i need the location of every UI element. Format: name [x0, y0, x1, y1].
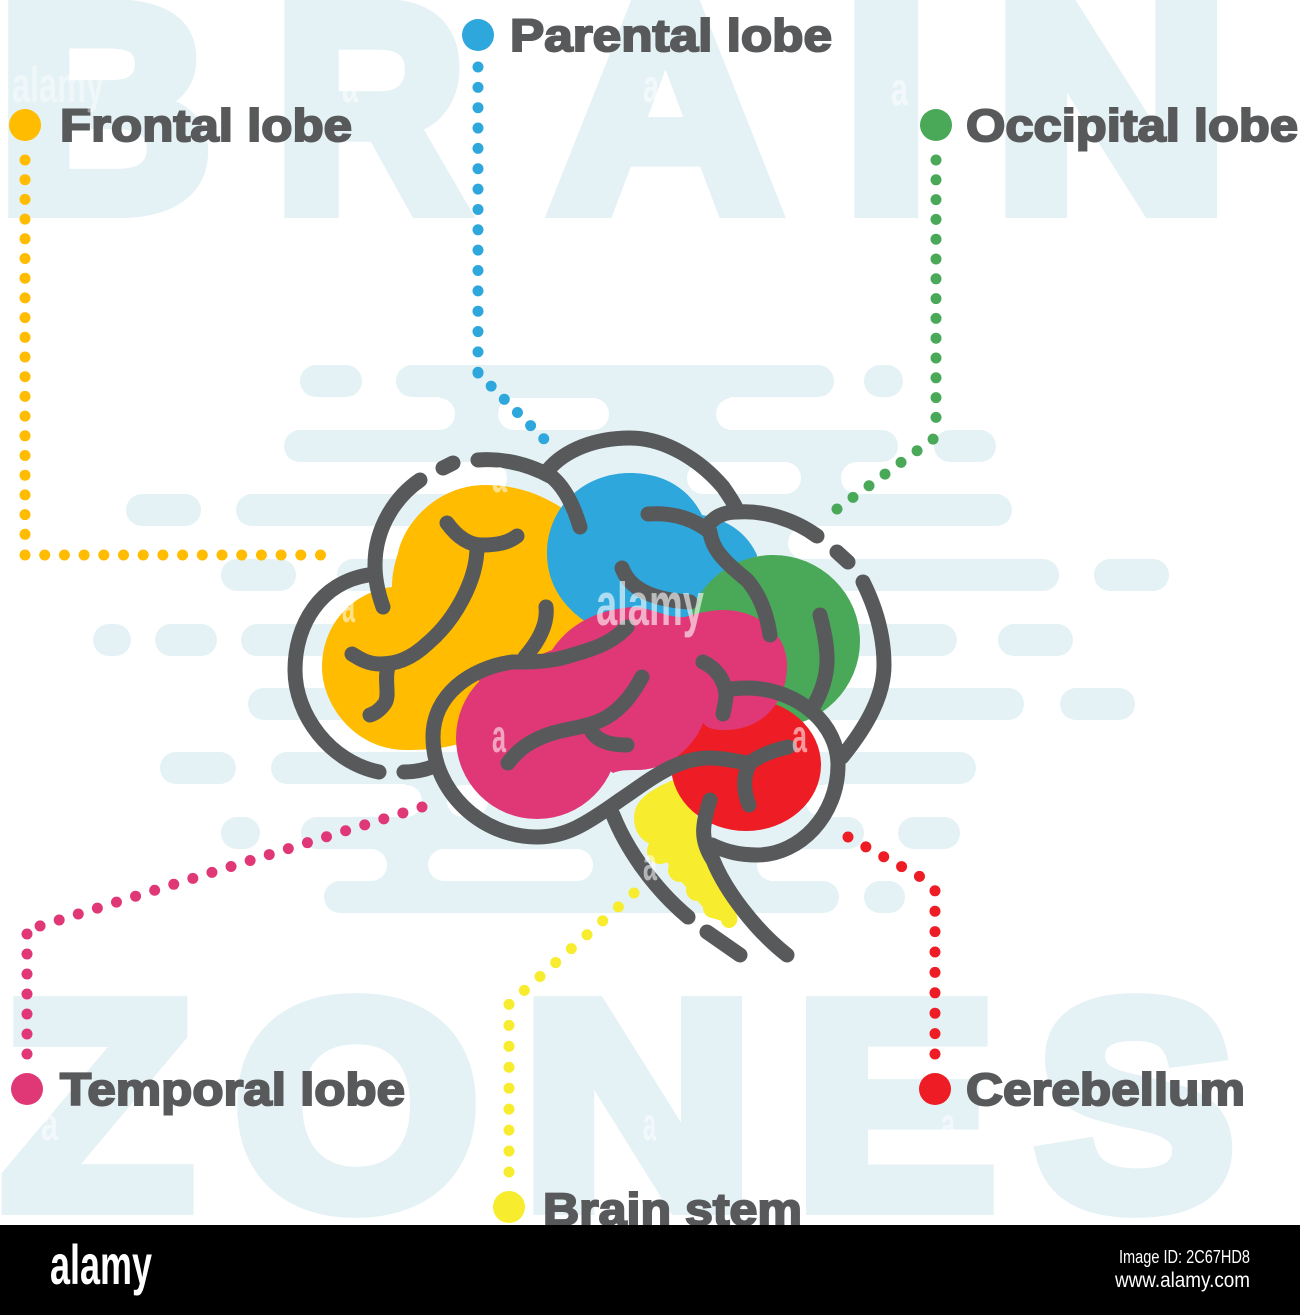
background word: ZONES: E — [795, 941, 996, 1268]
label: Frontal lobe: Frontal lobe — [60, 100, 352, 151]
parietal lobe zone: blue — [547, 473, 757, 640]
footer image id: Image ID: 2C67HD8 — [1119, 1247, 1250, 1267]
watermark marks: a — [342, 580, 355, 632]
label: Temporal lobe: Temporal lobe — [60, 1064, 405, 1115]
watermark marks: a — [342, 60, 358, 112]
watermark marks: a — [643, 1098, 656, 1150]
background word: BRAIN — [0, 0, 1229, 272]
connector: frontal lobe — [25, 160, 322, 555]
watermark marks: a — [941, 1098, 955, 1150]
footer url: www.alamy.com — [1114, 1269, 1250, 1292]
background word: ZONES — [2, 941, 1235, 1269]
connector: cerebellum — [848, 837, 935, 1054]
temporal lobe zone: pink — [456, 607, 787, 819]
frontal lobe zone: orange — [322, 485, 590, 750]
watermark marks: a — [492, 710, 506, 762]
connector: parental lobe — [478, 67, 546, 441]
watermark marks: a — [643, 60, 659, 112]
occipital lobe zone: green — [686, 555, 860, 727]
watermark marks: alamy — [12, 57, 104, 113]
footer logo: alamy — [50, 1233, 152, 1296]
watermark marks: a — [792, 710, 807, 762]
watermark marks — [12, 57, 955, 1150]
footer bar — [0, 1225, 1300, 1315]
brain outline and folds — [295, 438, 884, 955]
connector: occipital lobe — [837, 160, 936, 509]
label: Brain stem: Brain stem — [543, 1184, 802, 1235]
brain stem zone: yellow — [634, 780, 737, 928]
background pill stripes — [93, 365, 1169, 913]
watermark marks: alamy — [596, 571, 704, 638]
connector: brain stem — [509, 893, 634, 1172]
watermark marks: a — [41, 1098, 58, 1150]
connector: temporal lobe — [27, 807, 422, 1054]
background word: ZONES: Z — [2, 942, 193, 1269]
background word: ZONES: N — [522, 942, 754, 1269]
label: Occipital lobe: Occipital lobe — [966, 100, 1298, 151]
label: Cerebellum: Cerebellum — [966, 1064, 1245, 1115]
watermark marks: a — [492, 450, 507, 502]
watermark marks: a — [891, 63, 908, 115]
background word: ZONES: O — [234, 943, 479, 1268]
background word: ZONES: S — [1036, 943, 1235, 1268]
label: Parental lobe: Parental lobe — [510, 10, 832, 61]
watermark marks: a — [643, 838, 657, 890]
cerebellum zone: red — [671, 699, 821, 831]
